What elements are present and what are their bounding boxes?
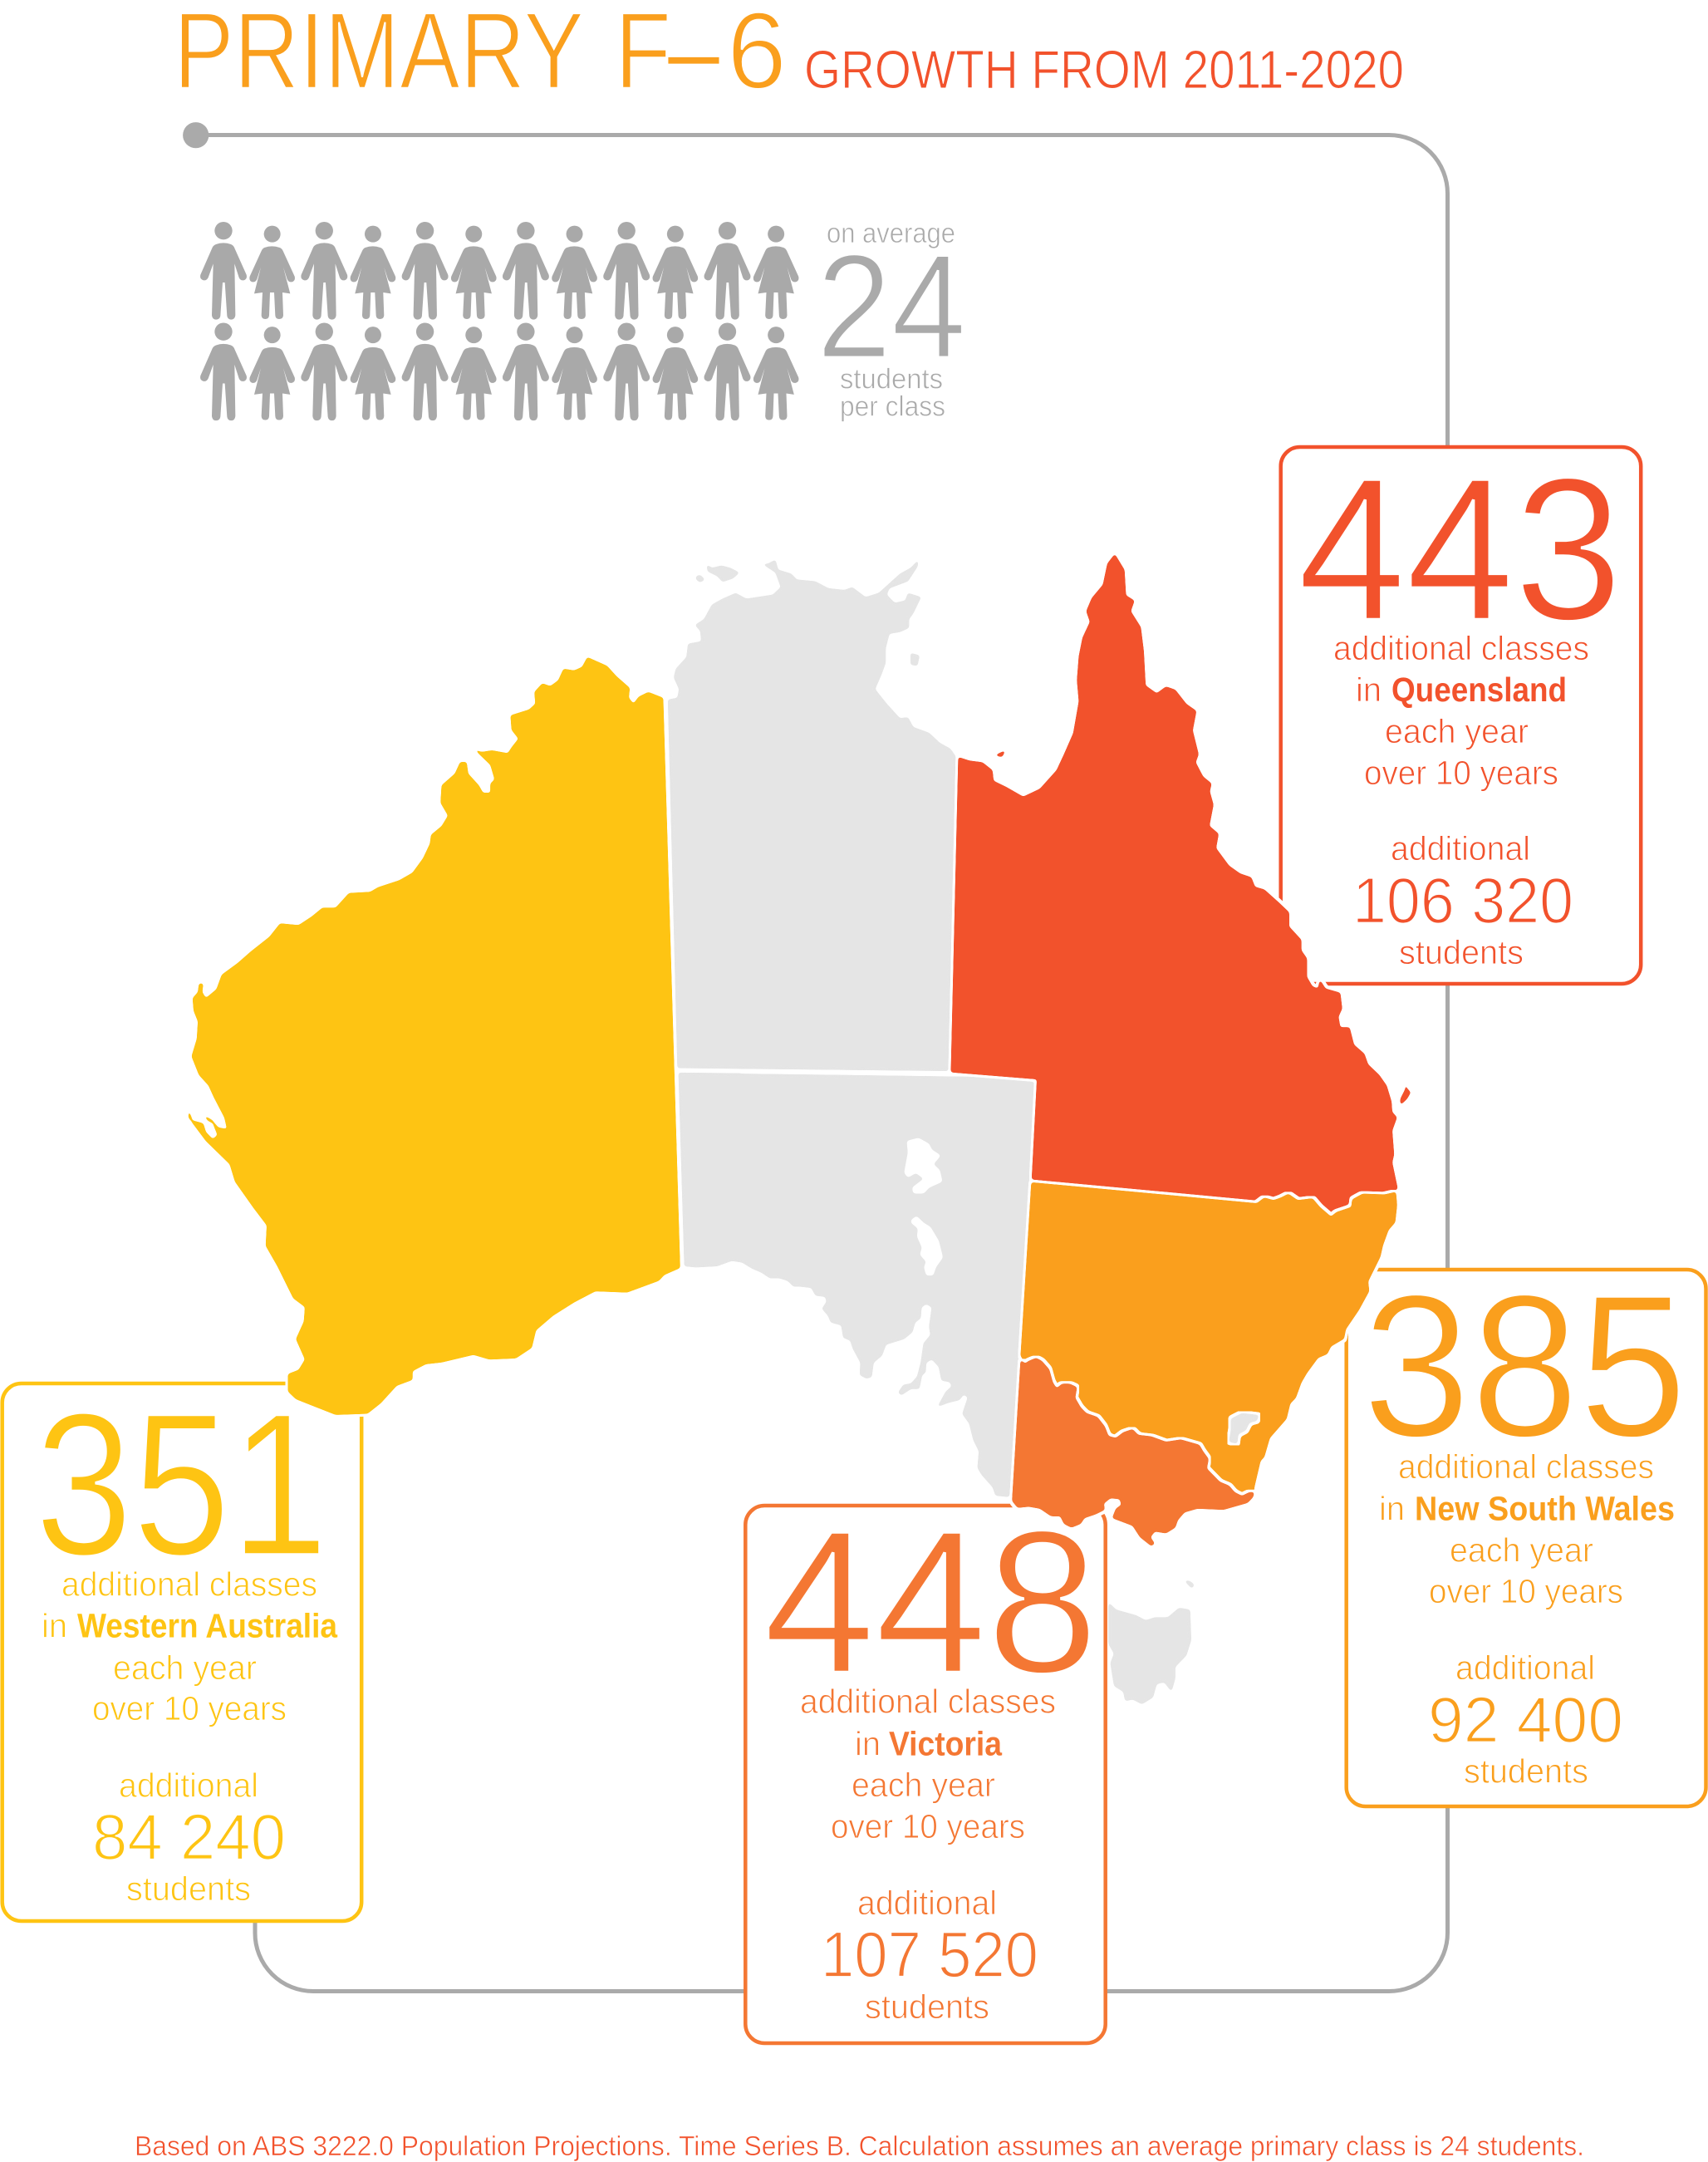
map: Western Australia <box>189 657 680 1415</box>
panel: Queensland: Queensland <box>1391 671 1567 709</box>
map: Queensland <box>951 554 1411 1216</box>
panel: Western Australia: additional <box>119 1766 258 1805</box>
frame start dot <box>183 122 209 148</box>
average class size callout: students <box>840 364 943 396</box>
panel: Western Australia: in <box>42 1607 67 1645</box>
panel: Western Australia: over 10 years <box>92 1689 287 1727</box>
panel: New South Wales <box>1347 1251 1706 1806</box>
average class size callout: 24 <box>817 224 966 389</box>
panel: Western Australia: 84 240 <box>92 1800 286 1873</box>
map: New South Wales <box>1021 1182 1397 1495</box>
panel: Western Australia: students <box>126 1870 251 1908</box>
panel: New South Wales: New South Wales <box>1415 1489 1675 1527</box>
class of 24 students icons <box>200 222 798 420</box>
panel: Western Australia: each year <box>113 1649 257 1687</box>
average class size callout: on average <box>827 218 955 249</box>
panel: Victoria: in <box>855 1725 881 1763</box>
panel: Victoria: Victoria <box>889 1725 1003 1763</box>
panel: Western Australia: 351 <box>35 1370 328 1598</box>
panel: Queensland: over 10 years <box>1364 754 1558 792</box>
map: Australian Capital Territory <box>1229 1413 1259 1444</box>
panel: Western Australia: additional classes <box>61 1565 317 1604</box>
panel: Victoria: over 10 years <box>831 1807 1025 1845</box>
panel: New South Wales: additional classes <box>1398 1447 1654 1486</box>
panel: New South Wales: 385 <box>1362 1251 1687 1479</box>
panel: Victoria: additional <box>857 1884 997 1922</box>
panel: Queensland: students <box>1399 933 1524 971</box>
panel: Victoria <box>745 1487 1106 2043</box>
panel: Queensland: additional <box>1391 829 1530 867</box>
panel: Western Australia <box>2 1370 361 1921</box>
map: Tasmania <box>1108 1580 1195 1704</box>
source note: Based on ABS 3222.0 Population Projections. Time Series B. Calculation assumes an average primary class is 24 students. <box>135 2130 1584 2161</box>
map of Australia <box>189 554 1411 1704</box>
panel: New South Wales: over 10 years <box>1429 1572 1623 1610</box>
panel: New South Wales: each year <box>1450 1531 1593 1569</box>
timeline frame <box>196 135 1447 1991</box>
panel: Victoria: students <box>865 1988 989 2026</box>
map: Northern Territory <box>668 560 955 1071</box>
panel: New South Wales: 92 400 <box>1428 1683 1623 1757</box>
panel: Western Australia: Western Australia <box>77 1607 338 1645</box>
panel: Queensland: 443 <box>1298 435 1622 663</box>
subtitle: GROWTH FROM 2011-2020 <box>804 39 1404 100</box>
panel: New South Wales: students <box>1464 1752 1588 1790</box>
average class size callout: per class <box>840 391 945 422</box>
panel: Victoria: 107 520 <box>821 1918 1038 1991</box>
panel: Queensland: each year <box>1385 712 1529 750</box>
map: Victoria <box>1012 1358 1254 1546</box>
panel: Queensland <box>1281 435 1641 984</box>
panel: Victoria: additional classes <box>800 1682 1056 1720</box>
panel: New South Wales: additional <box>1455 1649 1595 1687</box>
map: South Australia <box>679 1073 1037 1497</box>
panel: Victoria: 448 <box>763 1487 1098 1715</box>
panel: Queensland: 106 320 <box>1352 864 1573 937</box>
panel: Queensland: in <box>1356 671 1382 709</box>
panel: New South Wales: in <box>1379 1489 1405 1527</box>
panel: Queensland: additional classes <box>1333 629 1589 667</box>
panel: Victoria: each year <box>852 1766 995 1804</box>
